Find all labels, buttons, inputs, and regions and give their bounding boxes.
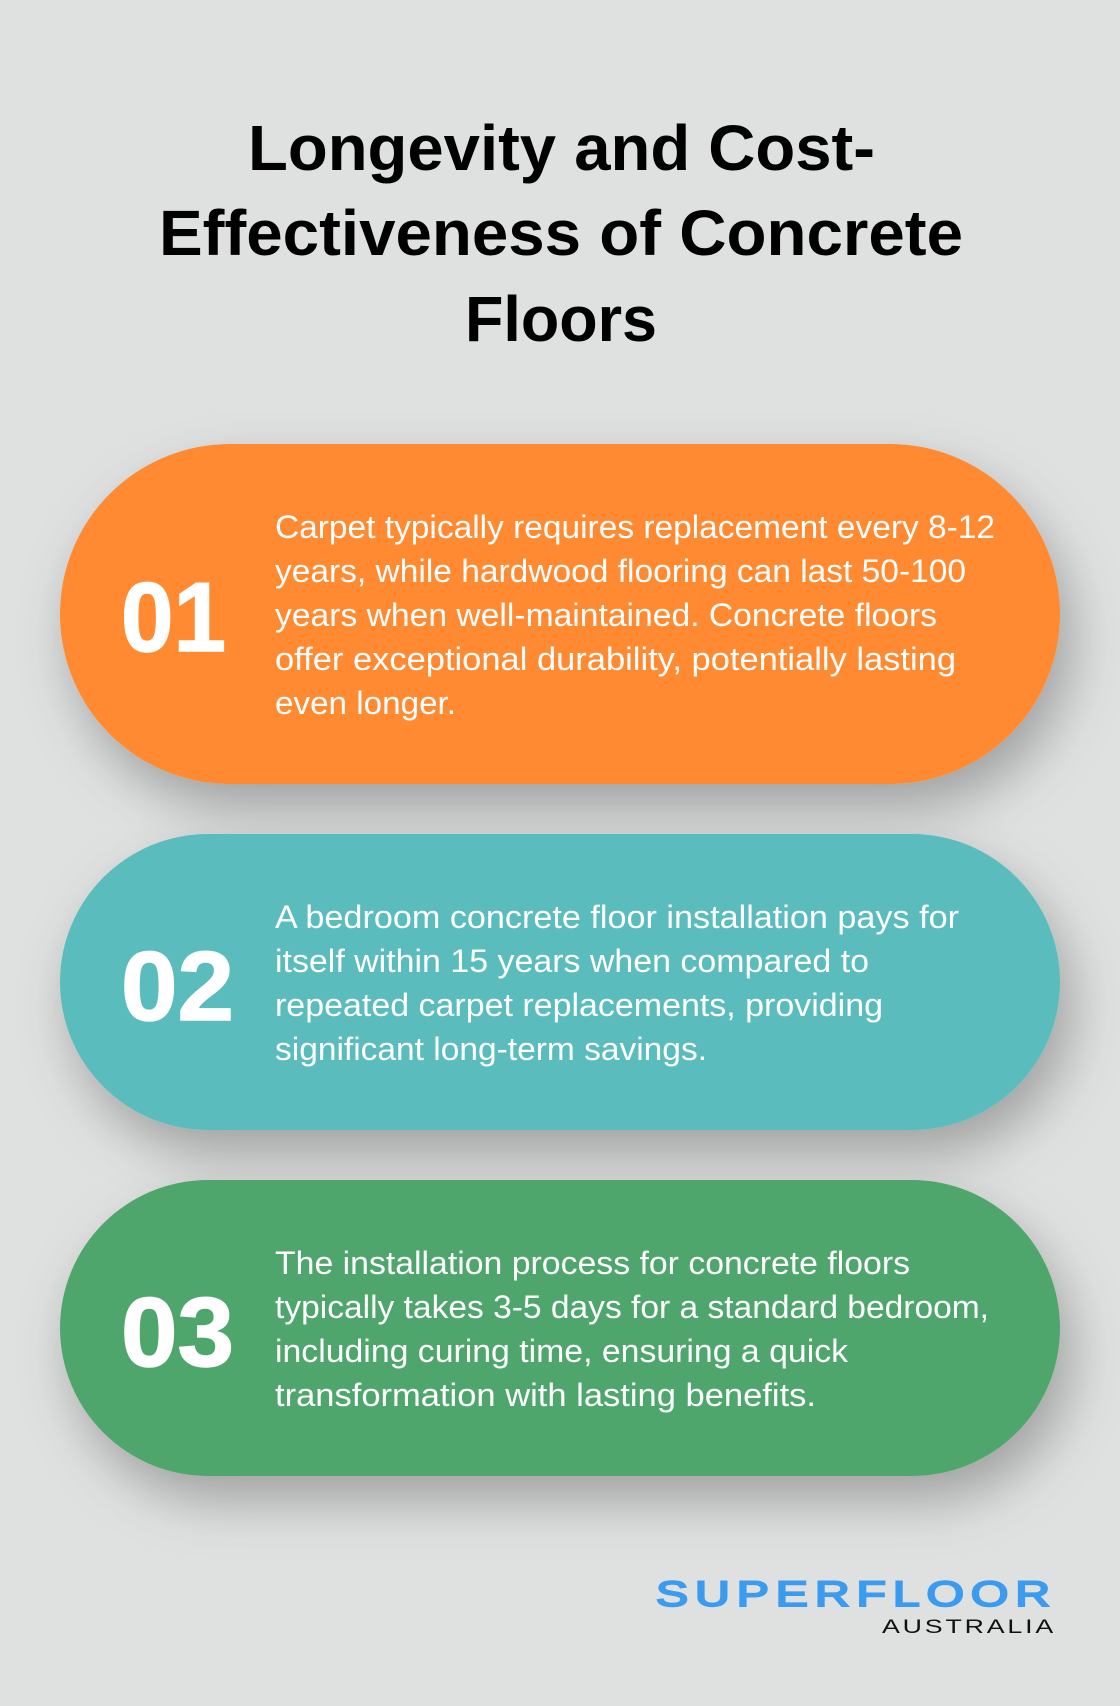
- step 01 text: offer exceptional durability, potentially lasting: [275, 641, 956, 677]
- step 03 text: including curing time, ensuring a quick: [275, 1333, 849, 1369]
- title: Effectiveness of Concrete: [159, 197, 963, 269]
- step 02 text: [275, 899, 959, 1067]
- step 03 text: The installation process for concrete floors: [275, 1245, 910, 1281]
- step number 03: 03: [121, 1277, 234, 1387]
- logo: Superfloor Australia: SUPERFLOOR: [656, 1575, 1057, 1614]
- step 02 text: significant long-term savings.: [275, 1031, 707, 1067]
- step 01 text: Carpet typically requires replacement every 8-12: [275, 509, 995, 545]
- title: Longevity and Cost-: [248, 112, 875, 184]
- title: Floors: [465, 283, 657, 355]
- step 01 text: years when well-maintained. Concrete floors: [275, 597, 937, 633]
- logo: Superfloor Australia: [656, 1575, 1057, 1638]
- title: [159, 112, 963, 355]
- step number 02: 02: [121, 931, 234, 1041]
- step 01 text: [275, 509, 995, 721]
- step 03 text: typically takes 3-5 days for a standard bedroom,: [275, 1289, 989, 1325]
- step 03 text: [275, 1245, 989, 1413]
- panel: step 02: [60, 834, 1060, 1130]
- step 01 text: even longer.: [275, 685, 456, 721]
- panel: step 03: [60, 1180, 1060, 1476]
- panel: step 01: [60, 444, 1060, 784]
- step number 01: 01: [121, 562, 226, 672]
- step 02 text: repeated carpet replacements, providing: [275, 987, 883, 1023]
- step 03 text: transformation with lasting benefits.: [275, 1377, 816, 1413]
- logo: Superfloor Australia: AUSTRALIA: [882, 1617, 1056, 1638]
- step 02 text: itself within 15 years when compared to: [275, 943, 869, 979]
- step 01 text: years, while hardwood flooring can last 50-100: [275, 553, 966, 589]
- step 02 text: A bedroom concrete floor installation pays for: [275, 899, 959, 935]
